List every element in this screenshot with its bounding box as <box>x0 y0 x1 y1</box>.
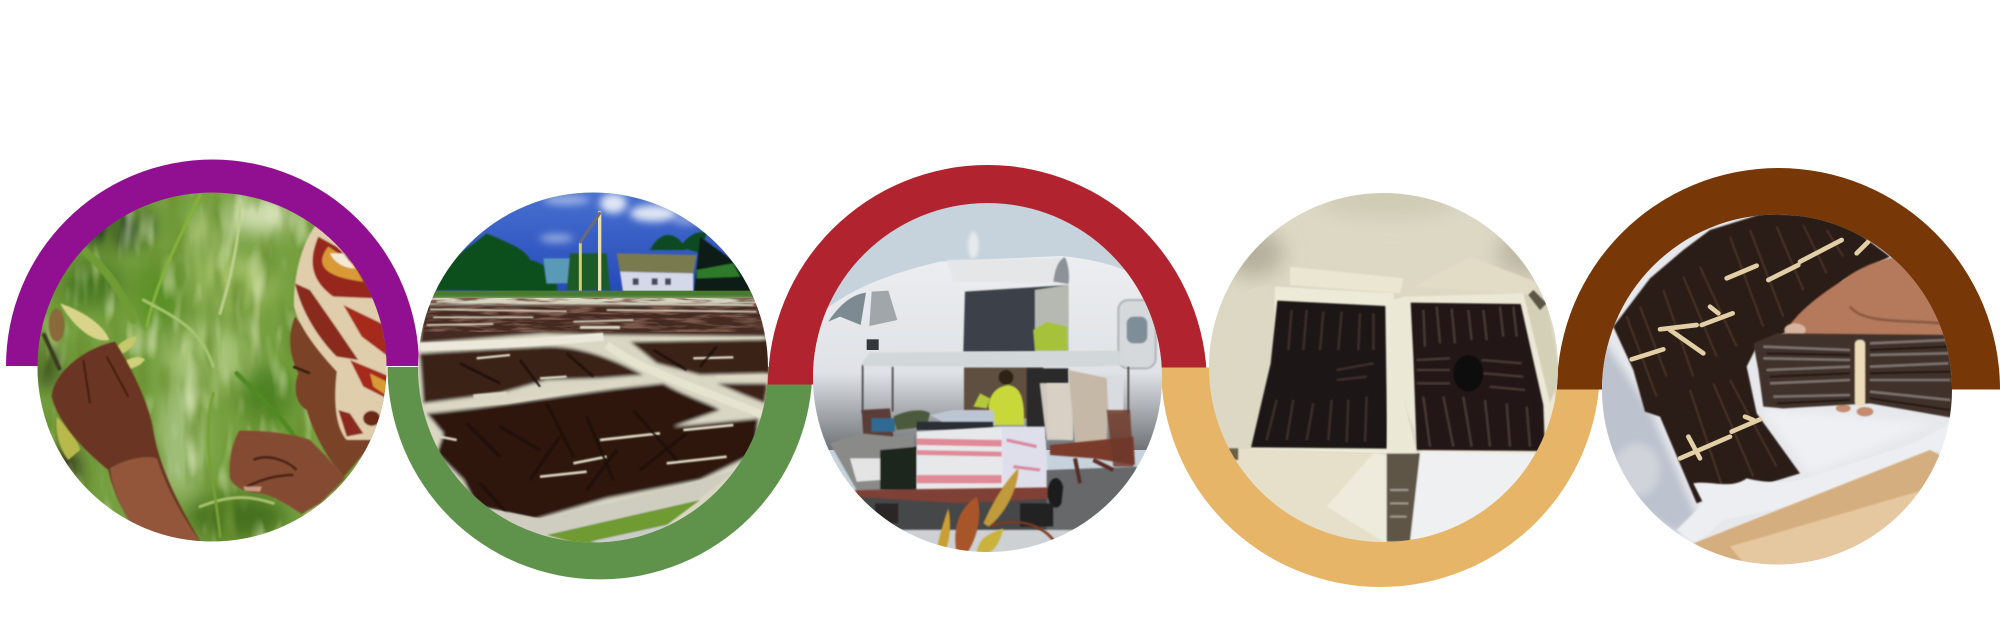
photo: cargo plane being loaded <box>813 203 1162 552</box>
passenger door <box>1118 300 1156 368</box>
left box of beans <box>1251 301 1387 449</box>
tissue paper flaps <box>1207 257 1560 453</box>
white tissue <box>1677 423 1953 543</box>
second hand <box>230 431 345 514</box>
photo: vanilla beans drying on mats <box>418 192 768 542</box>
vanilla flower buds <box>43 303 145 460</box>
tropical plant <box>937 468 1053 553</box>
foreground cloth and grass <box>488 472 734 542</box>
plastic wrap <box>1602 342 1696 534</box>
trees <box>433 232 757 300</box>
house <box>617 253 697 295</box>
hand <box>1783 257 1944 418</box>
wall shading <box>1234 193 1534 284</box>
arm and hand <box>52 342 202 543</box>
raffia ties <box>1632 240 1868 458</box>
arc: red upper half ring <box>768 165 1207 384</box>
right box of beans <box>1411 303 1545 451</box>
photo: farmer pollinating vanilla flower <box>38 192 386 542</box>
cargo door <box>947 257 1069 352</box>
arc: green lower half ring <box>388 367 812 579</box>
goal post <box>580 213 600 296</box>
sky with clouds <box>433 192 753 296</box>
cart frame and ground <box>854 409 1138 552</box>
mat highlights <box>420 302 767 477</box>
photo: two boxes of cured vanilla beans <box>1209 193 1558 542</box>
stacked sacks on cart <box>1047 370 1123 443</box>
head wrap <box>294 226 390 440</box>
luggage <box>830 408 995 493</box>
held bundle <box>1753 333 1955 418</box>
infographic: vanilla process chain of five circular photos <box>6 160 2000 587</box>
face <box>290 317 387 477</box>
cockpit windows <box>828 291 897 350</box>
arc: purple upper half ring <box>6 160 419 366</box>
lower paper wrapping <box>1228 290 1553 543</box>
bean streaks <box>1627 225 1843 490</box>
canopy <box>862 351 1128 420</box>
plane fuselage <box>793 256 1170 450</box>
cardboard box <box>1693 450 1953 570</box>
photo: hand holding bundle of vanilla beans <box>1602 214 1952 564</box>
bundles of vanilla beans <box>1613 213 1890 503</box>
drying mats with beans <box>420 298 770 537</box>
stacked cargo boxes <box>917 427 1048 493</box>
arc: tan lower half ring <box>1161 368 1600 587</box>
arc: brown upper half ring <box>1557 168 2000 390</box>
workers <box>973 368 1073 440</box>
